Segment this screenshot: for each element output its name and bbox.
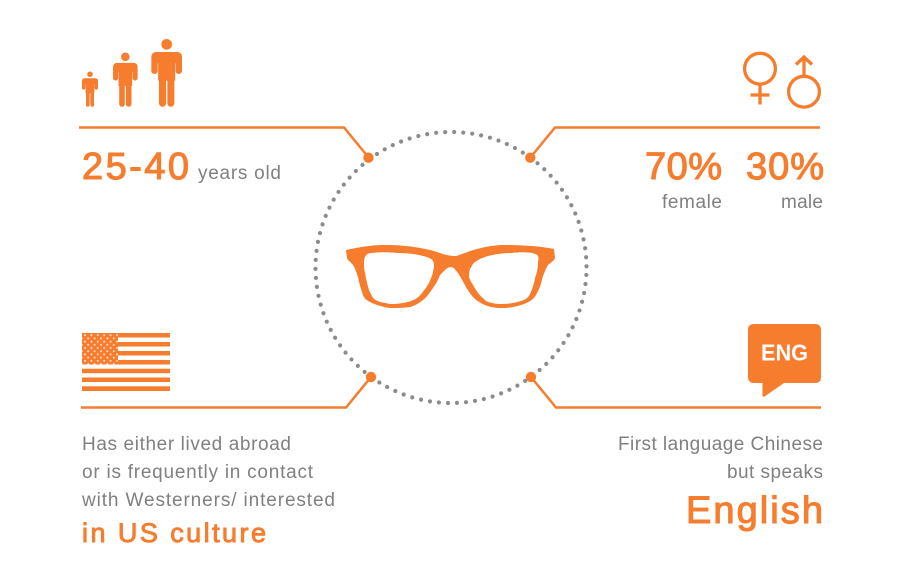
highlight: in US culture: in US culture — [82, 518, 266, 548]
icon: three people of growing height — [82, 39, 182, 107]
age range: 25-40 — [82, 146, 189, 188]
text: language description — [618, 434, 823, 483]
male label: male — [781, 192, 823, 213]
icon: small person — [82, 71, 98, 107]
icon: male symbol — [789, 57, 819, 107]
text: US exposure description — [81, 434, 335, 511]
text: US exposure description: Has either lived abroad — [82, 434, 291, 455]
female share: 70% — [645, 146, 722, 188]
male share: 30% — [746, 146, 824, 188]
dotted circle — [316, 132, 586, 403]
connector: bottom left — [81, 372, 376, 408]
age label: years old — [198, 163, 281, 184]
icon: ENG speech bubble: ENG — [761, 340, 808, 366]
text: US exposure description: with Westerners/ interested — [81, 490, 335, 511]
text: language description: First language Chinese — [618, 434, 823, 455]
text: language description: but speaks — [727, 462, 823, 483]
icon: ENG speech bubble — [748, 324, 821, 397]
icon: female symbol — [745, 53, 775, 104]
connector: bottom right — [526, 372, 821, 408]
highlight: English: English — [686, 490, 823, 532]
connector: top right — [525, 128, 820, 163]
connector: top left — [79, 128, 374, 163]
female label: female — [662, 192, 722, 213]
icon: large person — [151, 39, 182, 107]
icon: medium person — [113, 53, 138, 107]
text: US exposure description: or is frequently in contact — [82, 462, 314, 483]
icon: glasses — [346, 245, 555, 308]
icon: US flag — [82, 333, 170, 391]
